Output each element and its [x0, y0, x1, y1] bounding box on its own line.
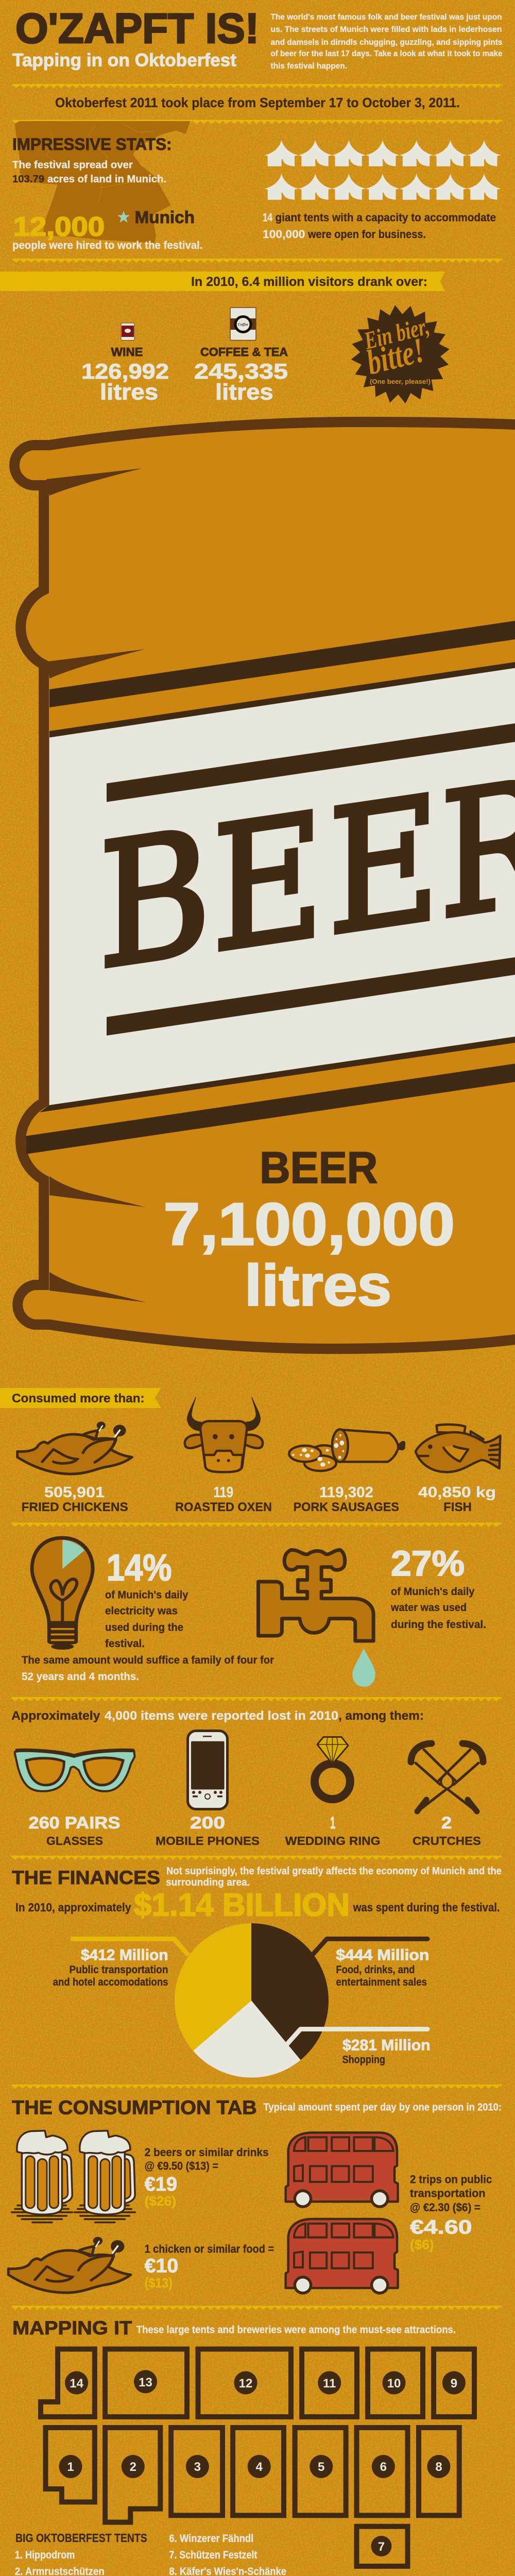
heading: consumption tab: THE CONSUMPTION TAB	[12, 2097, 257, 2119]
stat: acres: acres of land in Munich.	[47, 174, 166, 185]
stat: acres: 103.79	[12, 174, 44, 185]
caption: glasses: GLASSES	[46, 1834, 103, 1848]
coffee and tea figure: litres	[215, 379, 273, 405]
caption: mobile phones	[156, 1814, 260, 1848]
intro paragraph: us. The streets of Munich were filled with lads in lederhosen	[271, 25, 502, 34]
wine figure	[81, 345, 169, 405]
icon: fish	[416, 1425, 500, 1472]
lost items heading: Approximately	[11, 1709, 100, 1723]
cost: beer: 2 beers or similar drinks	[145, 2146, 269, 2159]
slice label: food: Food, drinks, and	[336, 1964, 415, 1976]
beer total	[164, 1143, 455, 1318]
icon: double decker buses	[286, 2132, 398, 2295]
leader lines	[71, 1939, 427, 2044]
caption: pork sausages: 119,302	[319, 1484, 373, 1501]
icon: crossed crutches	[411, 1743, 483, 1811]
caption: glasses	[29, 1814, 120, 1848]
coffee and tea figure: 245,335	[194, 359, 288, 383]
stat: tents capacity: 14	[263, 211, 273, 224]
stat: people hired	[12, 212, 203, 251]
slice label: shopping	[342, 2037, 431, 2066]
map number markers: 3	[194, 2460, 201, 2474]
beer mug illustration	[14, 422, 515, 1349]
map number markers: 10	[387, 2377, 401, 2391]
tents legend: BIG OKTOBERFEST TENTS	[15, 2531, 147, 2545]
headline figure: 1.14 billion: was spent during the festival.	[353, 1901, 500, 1914]
mug highlights	[46, 468, 146, 1302]
slice label: food: entertainment sales	[336, 1976, 427, 1988]
cost: chicken: 1 chicken or similar food =	[145, 2242, 274, 2255]
title: O'ZAPFT IS!	[15, 5, 259, 52]
map number markers: 14	[70, 2377, 84, 2391]
stat: acres	[12, 160, 166, 185]
date line: Oktoberfest 2011 took place from September 17 to October 3, 2011.	[55, 95, 460, 110]
stat: water: water was used	[390, 1602, 467, 1614]
map number markers: 9	[451, 2377, 457, 2391]
label panel	[40, 662, 515, 1112]
caption: wedding ring	[285, 1814, 381, 1848]
tents legend: 7. Schützen Festzelt	[169, 2549, 257, 2561]
stat: water: of Munich's daily	[391, 1586, 475, 1598]
map number markers: 6	[380, 2460, 387, 2474]
caption: wedding ring: 1	[330, 1814, 335, 1832]
cost: transport: @ €2.30 ($6) =	[410, 2201, 480, 2214]
slice label: transport: $412 Million	[81, 1946, 168, 1964]
lost items heading	[11, 1709, 424, 1723]
caption: roasted oxen	[175, 1484, 272, 1514]
caption: glasses: 260 PAIRS	[29, 1814, 120, 1832]
map number markers: 11	[323, 2377, 336, 2391]
upper band stripe	[49, 621, 515, 707]
icon: mobile phone	[187, 1731, 228, 1809]
heading: mapping it: MAPPING IT	[12, 2317, 132, 2338]
stat: tents capacity: giant tents with a capacity to accommodate	[275, 211, 496, 224]
stat: tents capacity: 100,000	[263, 228, 305, 241]
tents legend: 6. Winzerer Fähndl	[169, 2533, 253, 2545]
mug outline	[14, 422, 515, 1349]
map number markers	[59, 2370, 466, 2556]
stat: water: during the festival.	[391, 1619, 486, 1631]
icon: faucet	[258, 1550, 373, 1641]
caption: mobile phones: MOBILE PHONES	[156, 1834, 260, 1848]
wine figure: 126,992	[81, 359, 169, 383]
intro paragraph: of beer for the last 17 days. Take a look at what it took to make	[271, 49, 503, 58]
headline figure: 1.14 billion: $1.14 BILLION	[134, 1887, 350, 1923]
stat: people hired: people were hired to work the festival.	[12, 240, 203, 251]
beer total: 7,100,000	[164, 1191, 455, 1258]
tents legend	[15, 2531, 399, 2576]
stat: water: 27%	[391, 1544, 465, 1583]
caption: fried chickens: 505,901	[44, 1484, 105, 1501]
map of Bavaria	[15, 121, 191, 243]
map number markers: 7	[378, 2540, 385, 2554]
cost: beer: ($26)	[145, 2193, 176, 2209]
tent map	[41, 2349, 474, 2566]
map number markers: 13	[139, 2376, 152, 2389]
map number markers: 2	[130, 2460, 136, 2474]
cost: transport: ($6)	[410, 2237, 434, 2252]
map number markers: 12	[239, 2377, 252, 2391]
icon: light bulb	[32, 1538, 93, 1650]
wine figure: litres	[100, 379, 158, 405]
stat: acres: The festival spread over	[12, 160, 133, 171]
beer total: litres	[245, 1253, 391, 1318]
icon: glasses	[15, 1750, 134, 1791]
caption: fish	[418, 1484, 496, 1514]
caption: fish: FISH	[443, 1500, 472, 1514]
ribbon: visitors: In 2010, 6.4 million visitors drank over:	[191, 275, 427, 289]
icon: roast chicken	[8, 2237, 131, 2293]
icon: sausages	[289, 1429, 404, 1471]
icon: wedding ring	[315, 1737, 350, 1799]
slice label: shopping: Shopping	[342, 2054, 385, 2066]
heading: the finances: THE FINANCES	[12, 1867, 160, 1888]
intro paragraph: this festival happen.	[271, 62, 347, 71]
stat: electricity	[22, 1548, 274, 1683]
slice label: transport	[53, 1946, 168, 1988]
stat: electricity: electricity was	[105, 1605, 178, 1617]
callout: Ein bier bitte badge	[351, 305, 450, 403]
callout: Ein bier bitte badge: bitte!	[363, 330, 428, 382]
caption: roasted oxen: 119	[213, 1484, 233, 1501]
lower band stripe	[26, 1063, 515, 1154]
intro paragraph	[271, 13, 503, 71]
stat: tents capacity: were open for business.	[307, 228, 426, 241]
cost: beer: @ €9.50 ($13) =	[145, 2160, 218, 2173]
mapping intro: These large tents and breweries were among the must-see attractions.	[136, 2325, 456, 2336]
icon: coffee barrel	[230, 308, 256, 340]
finances intro: surrounding area.	[166, 1877, 250, 1888]
caption: pork sausages	[294, 1484, 399, 1514]
beer total: BEER	[260, 1143, 377, 1193]
consumption intro: Typical amount spent per day by one person in 2010:	[264, 2102, 502, 2113]
pie chart	[175, 1923, 329, 2078]
heading: impressive stats: IMPRESSIVE STATS:	[12, 135, 172, 154]
icon: beer mugs	[11, 2131, 135, 2223]
headline figure: 1.14 billion	[15, 1887, 500, 1923]
stat: water	[390, 1544, 486, 1631]
cost: transport: €4.60	[410, 2217, 472, 2239]
callout: Ein bier bitte badge: (One beer, please!)	[370, 378, 431, 385]
slice label: shopping: $281 Million	[342, 2037, 431, 2054]
slice label: food	[336, 1946, 429, 1988]
cost: transport	[410, 2173, 492, 2252]
intro paragraph: The world's most famous folk and beer festival was just upon	[271, 13, 502, 22]
tents legend: 1. Hippodrom	[15, 2549, 75, 2561]
cost: chicken	[145, 2242, 274, 2291]
caption: roasted oxen: ROASTED OXEN	[175, 1500, 272, 1514]
cost: chicken: €10	[145, 2256, 178, 2277]
coffee and tea figure: COFFEE & TEA	[200, 345, 288, 359]
cost: beer	[145, 2146, 269, 2209]
callout: Ein bier bitte badge: Ein bier,	[361, 312, 432, 355]
ribbon: consumed	[0, 1388, 161, 1408]
stat: electricity: The same amount would suffice a family of four for	[22, 1654, 274, 1666]
icon: wine barrel	[121, 323, 134, 340]
wine figure: WINE	[111, 345, 143, 359]
icon: water drop	[352, 1648, 375, 1687]
Munich marker: Munich	[135, 208, 195, 227]
icon: ox	[185, 1397, 263, 1472]
cost: chicken: ($13)	[145, 2275, 173, 2291]
icon: 14 tents	[265, 140, 501, 200]
cost: beer: €19	[145, 2174, 177, 2195]
caption: mobile phones: 200	[190, 1814, 225, 1832]
slice label: transport: and hotel accomodations	[53, 1976, 168, 1988]
cost: transport: 2 trips on public	[410, 2173, 492, 2185]
icon: coffee barrel: Coffee	[238, 322, 249, 327]
finances intro	[166, 1866, 502, 1888]
caption: fish: 40,850 kg	[418, 1484, 496, 1501]
caption: crutches: CRUTCHES	[413, 1834, 481, 1848]
lost items heading: , among them:	[338, 1709, 424, 1723]
slice label: transport: Public transportation	[69, 1964, 168, 1976]
map number markers: 4	[256, 2460, 263, 2474]
coffee and tea figure	[194, 345, 288, 405]
ribbon: consumed: Consumed more than:	[12, 1392, 145, 1405]
icon: chicken	[18, 1421, 132, 1474]
stat: electricity: 14%	[107, 1548, 172, 1589]
caption: crutches: 2	[441, 1814, 452, 1832]
ribbon: visitors	[0, 272, 445, 291]
subtitle: Tapping in on Oktoberfest	[12, 50, 236, 70]
intro paragraph: and damsels in dirndls chugging, guzzling, and sipping pints	[271, 38, 503, 47]
map number markers: 5	[318, 2460, 324, 2474]
map number markers: 8	[435, 2460, 442, 2474]
cost: transport: transportation	[410, 2187, 486, 2200]
slice label: food: $444 Million	[336, 1946, 429, 1964]
headline figure: 1.14 billion: In 2010, approximately	[15, 1901, 131, 1914]
stat: electricity: 52 years and 4 months.	[22, 1671, 139, 1683]
caption: fried chickens: FRIED CHICKENS	[22, 1500, 128, 1514]
stat: electricity: of Munich's daily	[105, 1589, 188, 1601]
caption: crutches	[413, 1814, 481, 1848]
stat: tents capacity	[263, 211, 496, 241]
caption: fried chickens	[22, 1484, 128, 1514]
lost items heading: 4,000 items were reported lost in 2010	[105, 1709, 338, 1723]
stat: electricity: used during the	[105, 1622, 183, 1633]
caption: wedding ring: WEDDING RING	[285, 1834, 381, 1848]
stat: electricity: festival.	[105, 1638, 145, 1650]
stat: people hired: 12,000	[13, 212, 105, 242]
caption: pork sausages: PORK SAUSAGES	[294, 1500, 399, 1514]
map number markers: 1	[67, 2460, 74, 2474]
